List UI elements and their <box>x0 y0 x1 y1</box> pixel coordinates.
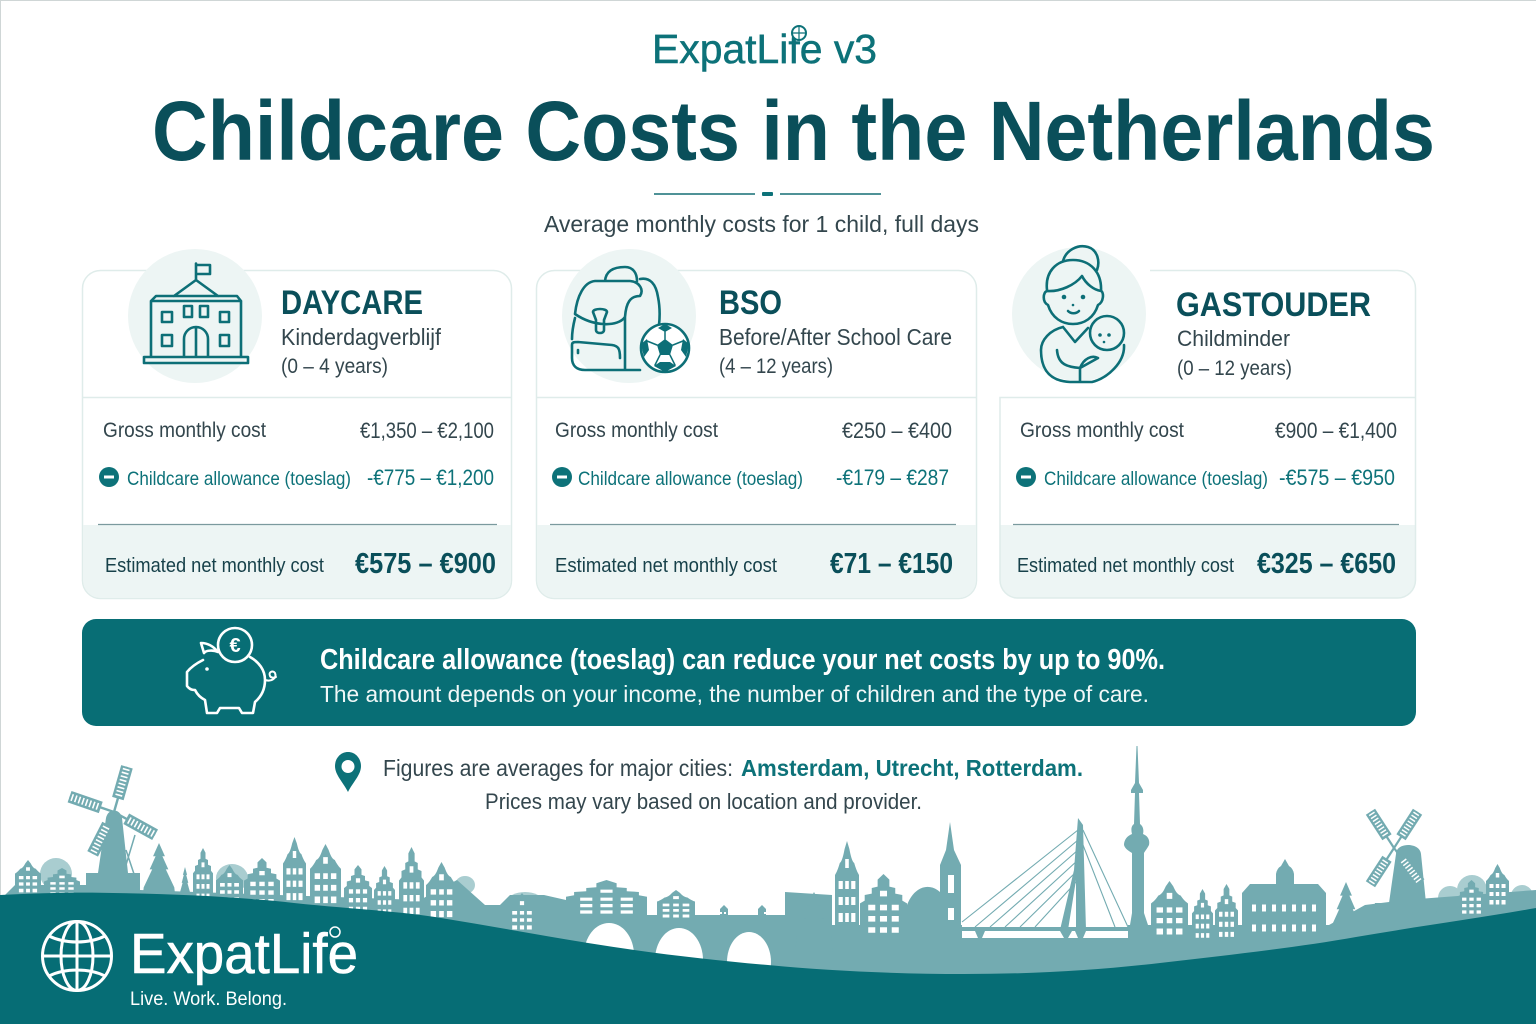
net monthly cost row: €575 – €900 <box>355 548 496 580</box>
Euromast tower <box>1124 746 1149 948</box>
title: Childcare Costs in the Netherlands <box>152 84 1435 178</box>
footer wave <box>0 893 1536 1024</box>
left trees and canal houses <box>142 837 536 938</box>
card subheading: Before/After School Care <box>719 324 952 350</box>
net monthly cost row: Estimated net monthly cost <box>1017 554 1234 577</box>
gross monthly cost row: €900 – €1,400 <box>1275 418 1397 443</box>
right houses <box>1457 864 1509 920</box>
bridge deck piers <box>962 927 1128 938</box>
card subheading: Childminder <box>1177 326 1290 351</box>
panel: daycare <box>82 249 512 598</box>
brand name: ExpatLife <box>130 922 358 986</box>
net monthly cost row: Estimated net monthly cost <box>555 554 777 577</box>
callout main message: Childcare allowance (toeslag) can reduce your net costs by up to 90%. <box>320 644 1165 676</box>
childcare allowance row: -€775 – €1,200 <box>367 465 494 490</box>
childcare allowance row <box>1016 465 1395 490</box>
panel: gastouder <box>1000 246 1416 598</box>
card subheading: Kinderdagverblijf <box>281 324 442 350</box>
bridge with palace <box>566 880 788 992</box>
gross monthly cost row: Gross monthly cost <box>555 419 718 442</box>
card heading: DAYCARE <box>281 284 423 322</box>
gross monthly cost row <box>555 418 952 443</box>
skyline illustration <box>0 746 1536 992</box>
childcare allowance row: Childcare allowance (toeslag) <box>578 468 803 490</box>
childcare allowance row <box>99 465 494 490</box>
brand header: ExpatLife v3: ExpatLife v3 <box>652 26 877 72</box>
net monthly cost row: €71 – €150 <box>830 548 953 580</box>
footer logo <box>42 922 358 1010</box>
city note with location pin: Amsterdam, Utrecht, Rotterdam. <box>741 755 1083 781</box>
net monthly cost row <box>1017 548 1396 580</box>
net monthly cost row <box>555 548 953 580</box>
net monthly cost row: Estimated net monthly cost <box>105 554 324 577</box>
childcare allowance row: Childcare allowance (toeslag) <box>127 468 351 490</box>
right canal houses, town hall and trees <box>1151 859 1363 947</box>
far-left houses <box>15 860 80 900</box>
childcare allowance row: -€179 – €287 <box>836 465 949 490</box>
childcare allowance row: -€575 – €950 <box>1279 465 1395 490</box>
net monthly cost row: €325 – €650 <box>1257 548 1396 580</box>
gross monthly cost row: €250 – €400 <box>842 418 952 443</box>
card heading: BSO <box>719 284 782 322</box>
skyline base mass <box>0 873 1536 975</box>
callout banner: allowance <box>82 619 1416 726</box>
city note with location pin <box>335 752 1083 814</box>
age range: (0 – 12 years) <box>1177 357 1292 380</box>
gross monthly cost row <box>103 418 494 443</box>
panel: BSO <box>536 249 976 598</box>
icon: childminder holding baby <box>1012 246 1146 382</box>
tagline: Live. Work. Belong. <box>130 989 287 1010</box>
childcare allowance row: Childcare allowance (toeslag) <box>1044 468 1268 490</box>
windmill right <box>1366 809 1440 915</box>
gross monthly cost row <box>1020 418 1397 443</box>
gross monthly cost row: Gross monthly cost <box>103 419 266 442</box>
light background bushes <box>40 858 1533 912</box>
icon: globe <box>42 922 112 990</box>
windmill left <box>68 765 158 877</box>
icon: backpack and football <box>562 249 696 383</box>
icon: school building <box>128 249 262 383</box>
net monthly cost row <box>105 548 496 580</box>
icon: piggy bank with euro coin <box>187 628 276 713</box>
gross monthly cost row: Gross monthly cost <box>1020 419 1184 442</box>
gross monthly cost row: €1,350 – €2,100 <box>360 418 494 443</box>
childcare allowance row <box>552 465 949 490</box>
icon: piggy bank with euro coin: € <box>229 635 241 657</box>
card heading: GASTOUDER <box>1176 286 1371 324</box>
icon: location pin <box>335 752 361 792</box>
age range: (4 – 12 years) <box>719 355 833 378</box>
city note with location pin: Figures are averages for major cities: <box>383 755 733 781</box>
central towers <box>795 822 961 952</box>
callout detail: The amount depends on your income, the number of children and the type of care. <box>320 681 1149 707</box>
Erasmus bridge <box>962 818 1128 930</box>
age range: (0 – 4 years) <box>281 355 388 378</box>
subtitle: Average monthly costs for 1 child, full days <box>544 211 979 237</box>
city note with location pin: Prices may vary based on location and provider. <box>485 789 922 814</box>
